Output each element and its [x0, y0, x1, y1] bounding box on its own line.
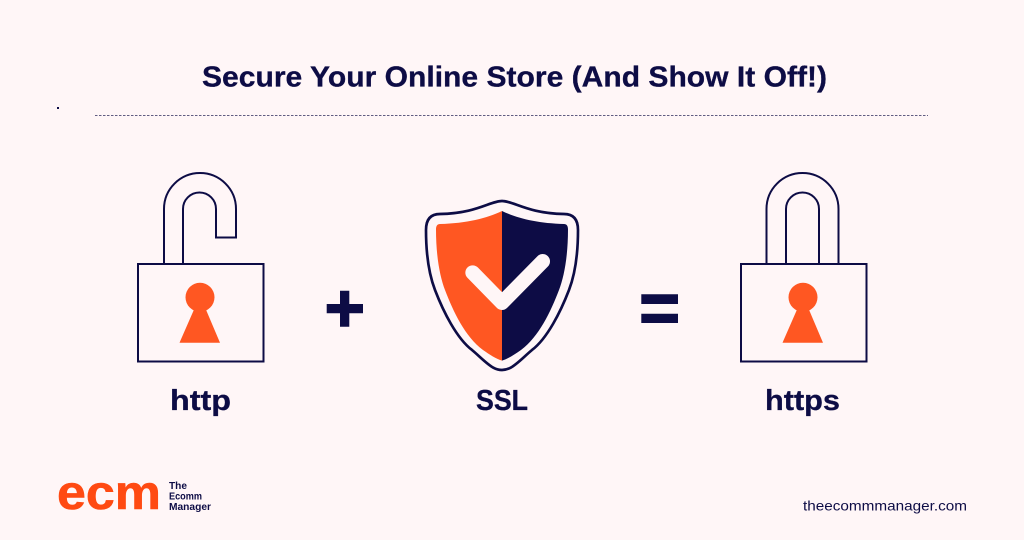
icon: shield with check mark: [426, 201, 578, 370]
logo: ecm The Ecomm Manager: Ecomm: [169, 492, 202, 502]
logo: ecm The Ecomm Manager: Manager: [169, 502, 211, 513]
logo: ecm The Ecomm Manager: The: [169, 481, 187, 492]
icon: closed padlock: [741, 173, 866, 362]
label: https: https: [765, 385, 840, 417]
icon: plus sign: [327, 291, 363, 327]
logo: ecm The Ecomm Manager: ecm: [57, 467, 161, 520]
logo: ecm The Ecomm Manager: [57, 467, 211, 520]
icon: equals sign: [641, 294, 678, 323]
title: Secure Your Online Store (And Show It Off!): [202, 62, 827, 94]
icon: open padlock: [138, 173, 264, 362]
website url: theecommmanager.com: [803, 498, 967, 514]
label: SSL: SSL: [476, 385, 528, 417]
label: http: http: [170, 385, 231, 417]
